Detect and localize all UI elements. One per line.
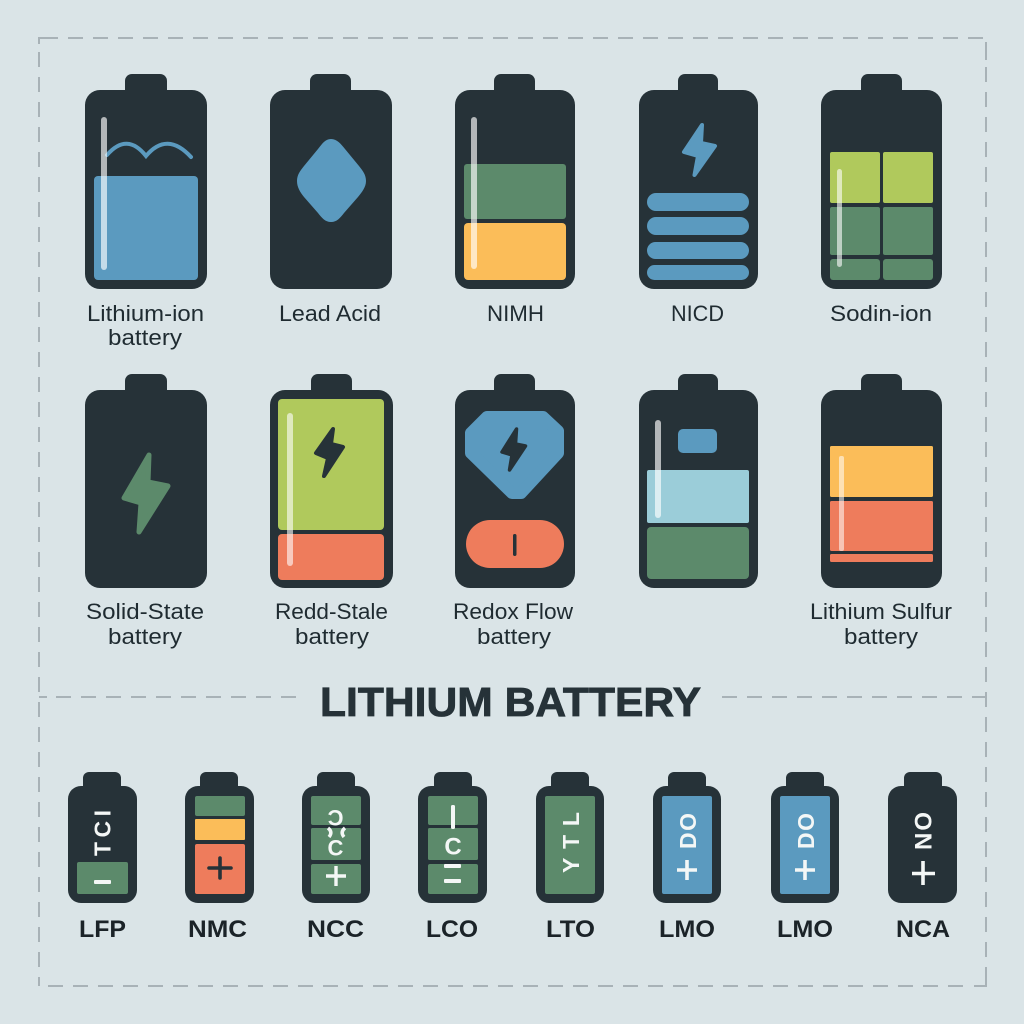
green cells bbox=[428, 796, 478, 894]
title: LITHIUM BATTERY bbox=[320, 679, 701, 725]
battery: Solid-State bbox=[85, 374, 207, 649]
small battery: NCA bbox=[888, 772, 957, 943]
red layer bbox=[195, 844, 245, 894]
label: LCO bbox=[426, 916, 478, 943]
stacked plates bbox=[647, 193, 749, 280]
label: battery bbox=[108, 325, 182, 350]
label: Lithium-ion bbox=[87, 301, 204, 326]
pill tick bbox=[513, 534, 516, 556]
label: battery bbox=[844, 624, 918, 649]
plus sign bbox=[912, 861, 935, 885]
highlight bbox=[655, 420, 661, 518]
label: LMO bbox=[777, 916, 833, 943]
label: NCA bbox=[896, 916, 950, 943]
yellow layer bbox=[464, 223, 566, 280]
small battery: NMC bbox=[185, 772, 254, 943]
green layer bbox=[464, 164, 566, 219]
label bbox=[87, 301, 204, 350]
label: Lithium Sulfur bbox=[810, 599, 952, 624]
label: LFP bbox=[79, 916, 126, 943]
light blue layer bbox=[647, 470, 749, 523]
bolt icon bbox=[684, 125, 715, 175]
highlight bbox=[471, 117, 477, 269]
highlight bbox=[101, 117, 107, 270]
label: NICD bbox=[671, 301, 724, 326]
battery: Redd-State bbox=[270, 374, 393, 649]
red layer bbox=[830, 501, 933, 551]
label bbox=[810, 599, 952, 649]
battery: Lithium Sulfur bbox=[810, 374, 952, 649]
small battery: NCC bbox=[302, 772, 370, 943]
bolt icon bbox=[502, 429, 526, 470]
label bbox=[453, 599, 573, 649]
label: battery bbox=[477, 624, 551, 649]
glyph marks bbox=[444, 805, 462, 883]
glyph marks: C bbox=[328, 836, 344, 860]
battery: Sodium-ion bbox=[821, 74, 942, 326]
battery: Lead Acid bbox=[270, 74, 392, 326]
yellow layer bbox=[830, 446, 933, 497]
blue fill bbox=[780, 796, 830, 894]
minus sign bbox=[94, 880, 111, 884]
green block bbox=[77, 862, 128, 894]
label bbox=[86, 599, 204, 649]
small battery: LFP bbox=[68, 772, 137, 943]
bolt icon bbox=[124, 455, 168, 532]
plus sign bbox=[209, 858, 231, 878]
label: LMO bbox=[659, 916, 715, 943]
green layer bbox=[647, 527, 749, 579]
small battery: LCO bbox=[418, 772, 487, 943]
bolt icon bbox=[316, 429, 343, 476]
glyph marks: C bbox=[444, 834, 462, 860]
glyph marks: C bbox=[327, 805, 343, 830]
small blue block bbox=[678, 429, 717, 453]
rotated glyphs: YTL bbox=[558, 812, 584, 873]
rotated glyphs: TCI bbox=[89, 810, 115, 856]
rotated glyphs: DO bbox=[793, 813, 819, 849]
red strip bbox=[830, 554, 933, 562]
label: battery bbox=[295, 624, 369, 649]
label: NMC bbox=[188, 916, 247, 943]
blue tank bbox=[471, 417, 558, 493]
red pill bbox=[466, 520, 564, 568]
diamond icon bbox=[297, 139, 366, 222]
green fill bbox=[545, 796, 595, 894]
battery: NICD bbox=[639, 74, 758, 326]
label: Sodin-ion bbox=[830, 301, 932, 326]
plus sign bbox=[677, 860, 697, 880]
electrolyte fill bbox=[94, 176, 198, 280]
label: Lead Acid bbox=[279, 301, 381, 326]
battery: Lithium-ion bbox=[85, 74, 207, 350]
small battery: LMO bbox=[653, 772, 721, 943]
label: Solid-State bbox=[86, 599, 204, 624]
green layer bbox=[278, 399, 384, 530]
blue fill bbox=[662, 796, 712, 894]
battery: Redox Flow bbox=[453, 374, 575, 649]
green cells bbox=[311, 796, 361, 894]
label bbox=[275, 599, 388, 649]
green layer bbox=[195, 796, 245, 816]
small battery: LTO bbox=[536, 772, 604, 943]
rotated glyphs: DO bbox=[675, 813, 701, 849]
label: Redd-Stale bbox=[275, 599, 388, 624]
rotated glyphs: NO bbox=[911, 812, 938, 850]
label: NIMH bbox=[487, 301, 544, 326]
highlight bbox=[839, 456, 844, 551]
battery: NIMH bbox=[455, 74, 575, 326]
label: Redox Flow bbox=[453, 599, 573, 624]
yellow layer bbox=[195, 819, 245, 840]
highlight bbox=[287, 413, 293, 566]
wave icon bbox=[107, 144, 191, 157]
plus sign bbox=[795, 860, 815, 880]
battery: unlabelled blue and green bbox=[639, 374, 758, 588]
glyph marks bbox=[326, 805, 346, 886]
small battery: LMO second bbox=[771, 772, 839, 943]
label: NCC bbox=[307, 916, 364, 943]
label: LTO bbox=[546, 916, 595, 943]
highlight bbox=[837, 169, 842, 267]
cell grid bbox=[830, 152, 933, 280]
label: battery bbox=[108, 624, 182, 649]
red layer bbox=[278, 534, 384, 580]
